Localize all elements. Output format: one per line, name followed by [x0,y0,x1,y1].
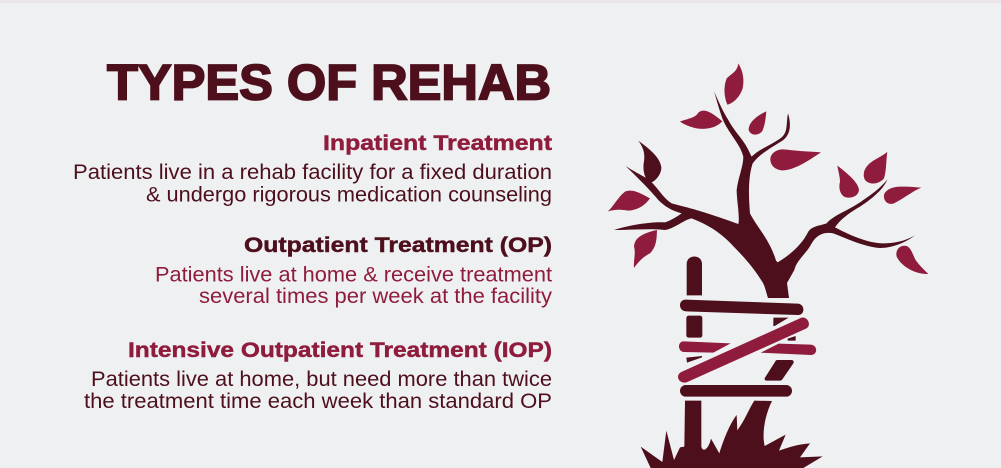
description: intensive outpatient [84,367,552,413]
lower splint and grass [641,401,823,468]
text block: inpatient treatment [73,131,552,206]
title: TYPES OF REHAB [107,54,551,110]
description: outpatient: several times per week at the facility [199,284,552,308]
illustration: tree with splint [608,63,928,468]
splint and bandages [641,256,823,468]
tree trunk and branches [614,91,915,298]
text block: outpatient treatment [155,233,552,308]
description: outpatient [155,262,552,308]
description: intensive outpatient: Patients live at home, but need more than twice [91,367,552,391]
description: outpatient: Patients live at home & receive treatment [155,262,552,286]
red bandages [678,317,816,383]
description: inpatient: Patients live in a rehab facility for a fixed duration [73,160,552,184]
text block: intensive outpatient treatment [84,338,552,413]
dark leaf [638,141,661,183]
heading: intensive outpatient: Intensive Outpatient Treatment (IOP) [128,338,552,362]
dark bandages [680,300,803,315]
red leaves [608,63,928,274]
description: inpatient [73,160,552,206]
description: inpatient: & undergo rigorous medication counseling [146,182,552,206]
heading: outpatient: Outpatient Treatment (OP) [244,233,552,257]
description: intensive outpatient: the treatment time each week than standard OP [84,389,552,413]
heading: inpatient: Inpatient Treatment [323,131,552,155]
dark splint pieces [641,256,823,468]
